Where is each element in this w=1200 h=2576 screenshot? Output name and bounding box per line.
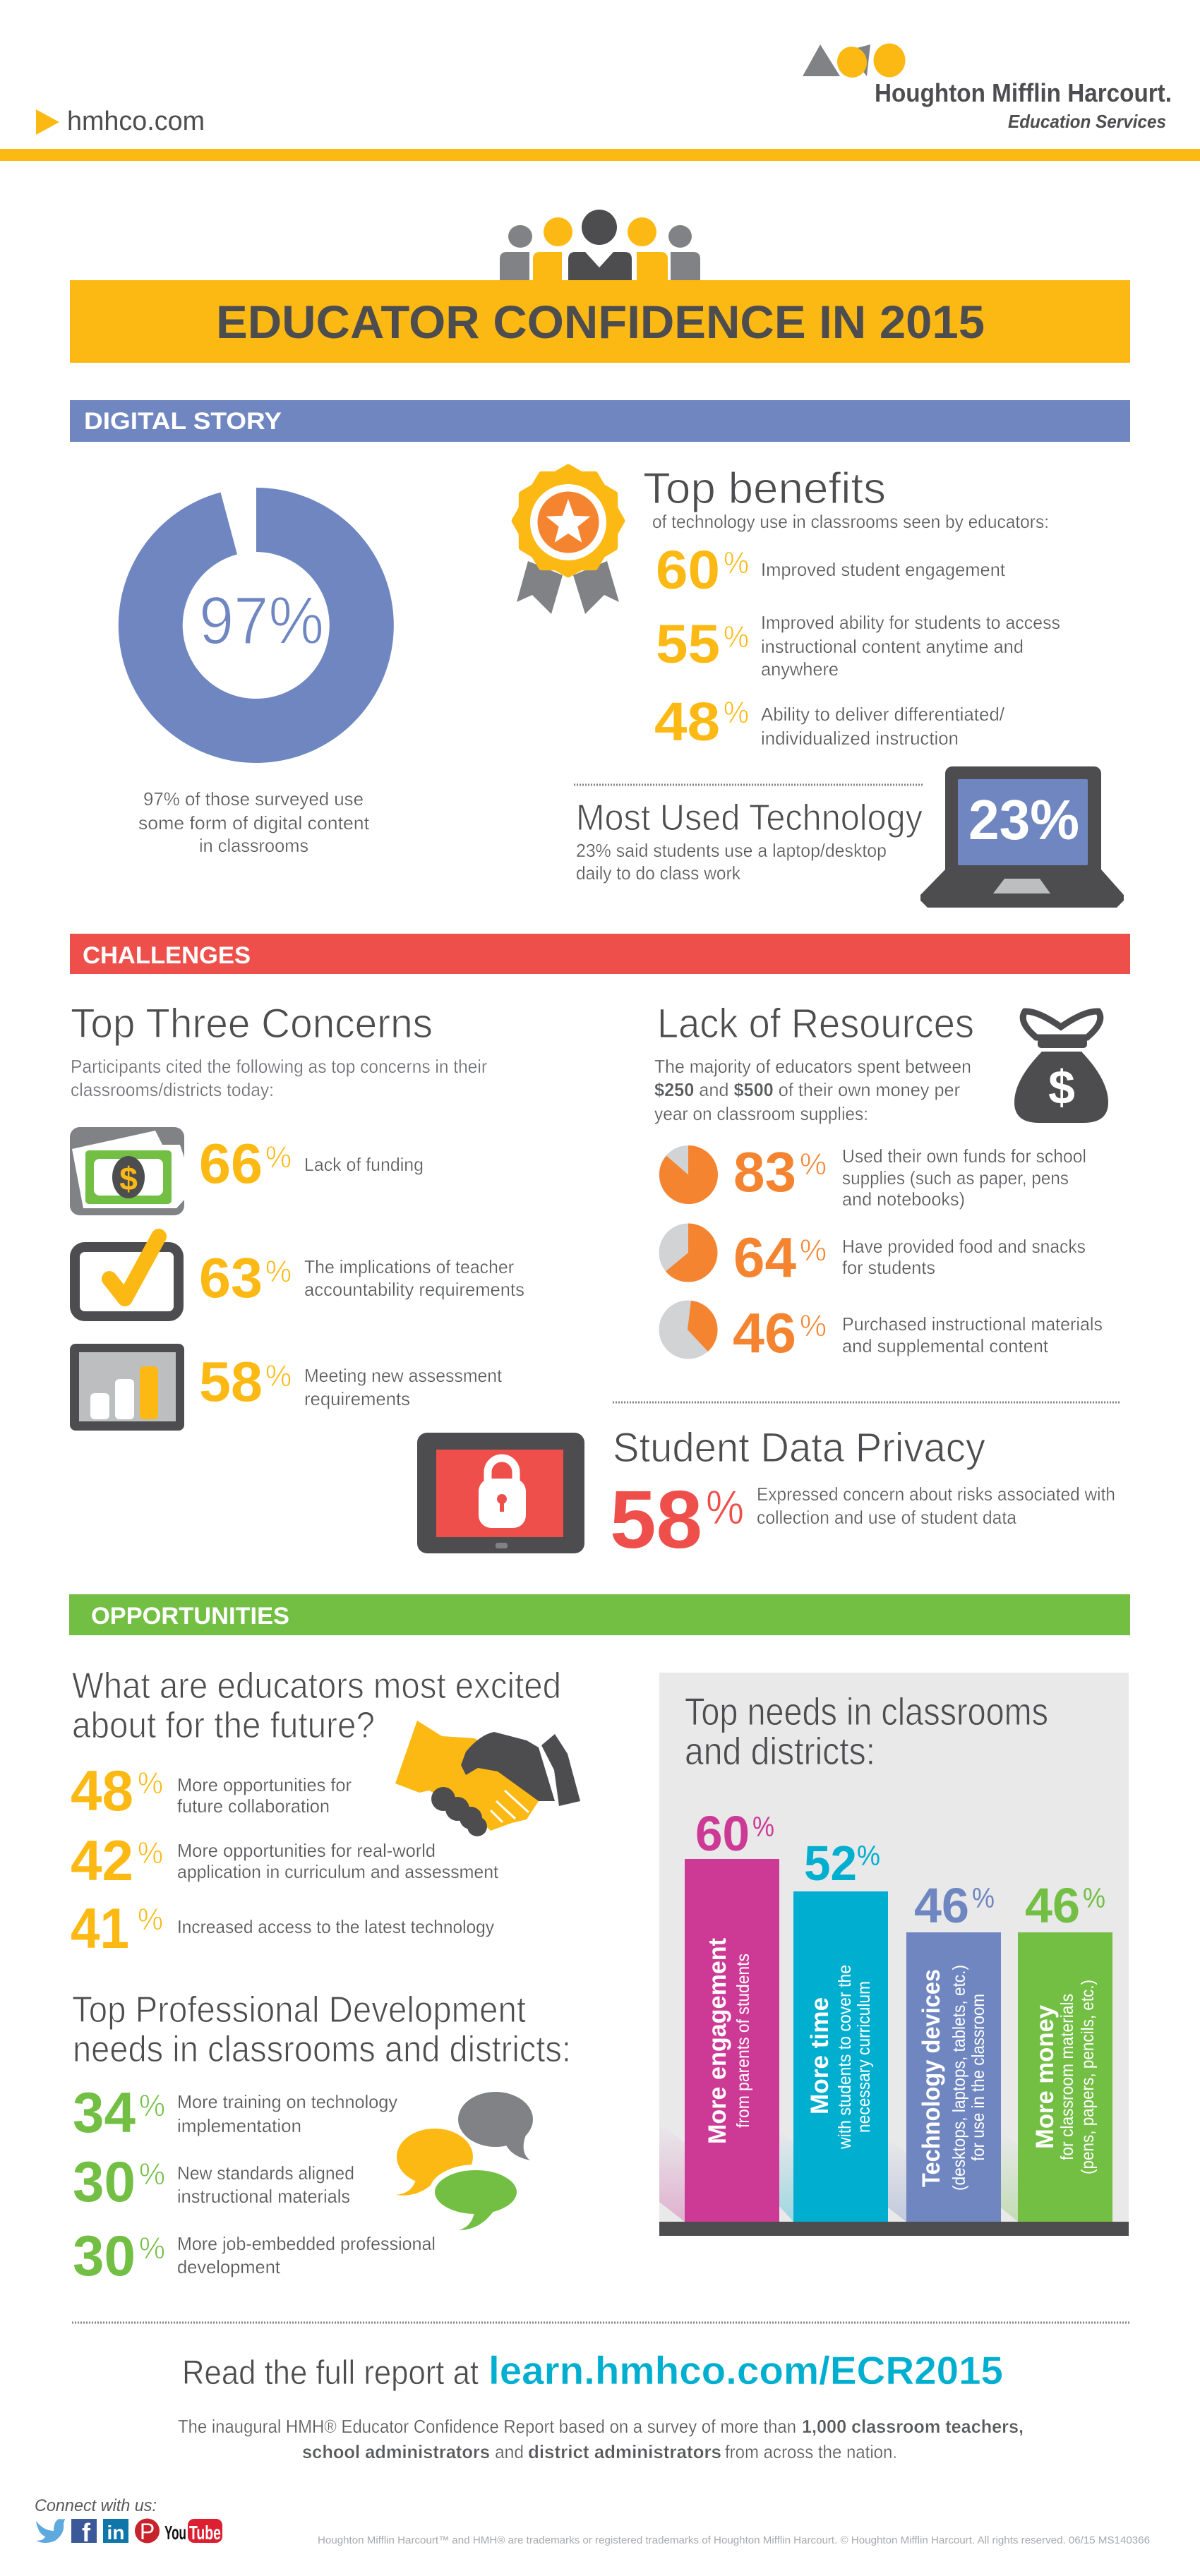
stat: 66%: % (265, 1140, 292, 1174)
report description: The inaugural HMH® Educator Confidence Report based on a survey of more than (178, 2416, 796, 2437)
stat: 60%: Improved student engagement (761, 559, 1006, 580)
bar: more time 52%: with students to cover the (835, 1965, 855, 2150)
bar: more time 52% (793, 1836, 888, 2222)
stat: 58%: Meeting new assessment (304, 1365, 503, 1386)
stat: 30% second: % (139, 2231, 165, 2265)
stat: 83%: % (800, 1147, 827, 1181)
bar: more money 46%: 46 (1025, 1878, 1080, 1933)
icon: bar chart (70, 1344, 184, 1431)
stat: 30% (73, 2150, 354, 2214)
panel: top three concerns: Top Three Concerns (71, 1001, 433, 1047)
stat: 34%: implementation (177, 2115, 301, 2136)
icon: linkedin (103, 2519, 128, 2544)
panel: professional development needs: Top Professional Development (72, 1990, 526, 2030)
stat: 63%: 63 (199, 1246, 263, 1309)
stat: 48%: More opportunities for (177, 1774, 352, 1795)
stat: 64%: for students (842, 1257, 935, 1278)
section header: challenges: CHALLENGES (83, 942, 251, 969)
stat: 58%: 58 (199, 1350, 263, 1413)
subheading: of technology use in classrooms seen by educators: (652, 511, 1049, 532)
report description: from across the nation. (725, 2441, 897, 2462)
bar: more money 46%: (pens, papers, pencils, etc.) (1078, 1980, 1098, 2174)
stat: 55% (656, 612, 1060, 680)
social media (35, 2496, 222, 2547)
icon: youtube (164, 2519, 222, 2544)
title: EDUCATOR CONFIDENCE IN 2015 (216, 296, 985, 348)
stat: 63%: The implications of teacher (304, 1256, 514, 1277)
icon: laptop 23%: 23% (968, 788, 1079, 851)
donut caption: some form of digital content (138, 812, 370, 833)
stat: 66%: 66 (199, 1132, 263, 1195)
icon: money: $ (119, 1160, 138, 1197)
logo division name: Education Services (1008, 111, 1166, 132)
panel: student data privacy (610, 1425, 1115, 1565)
icon: group of people (500, 210, 700, 280)
chart baseline (659, 2222, 1129, 2236)
stat: 46%: and supplemental content (842, 1335, 1049, 1356)
section header: opportunities (69, 1594, 1130, 1635)
bar: more engagement 60%: More engagement (704, 1938, 731, 2144)
stat: 30%: New standards aligned (177, 2162, 354, 2184)
stat: 46%: 46 (733, 1301, 796, 1364)
stat: 63% (199, 1246, 524, 1309)
bar: more money 46%: % (1083, 1883, 1105, 1914)
panel: excitement for the future (71, 1666, 580, 1961)
logo wordmark: Houghton Mifflin Harcourt. (875, 78, 1172, 107)
stat: 60%: 60 (656, 540, 720, 601)
bar: technology devices 46%: 46 (914, 1878, 969, 1933)
stat: 64% (733, 1226, 1086, 1289)
panel: student data privacy: % (706, 1481, 744, 1534)
panel: excitement for the future: about for the future? (72, 1705, 375, 1746)
panel: student data privacy: 58 (610, 1474, 702, 1565)
bar: more engagement 60%: from parents of students (733, 1954, 753, 2128)
donut chart: 97%: 97% (199, 583, 324, 658)
stat: 48%: Ability to deliver differentiated/ (761, 704, 1005, 725)
call to action: learn.hmhco.com/ECR2015 (488, 2348, 1003, 2393)
stat: 63%: % (265, 1254, 292, 1289)
stat: 30% second (73, 2225, 436, 2288)
stat: 48%: % (138, 1766, 163, 1800)
stat: 41%: 41 (71, 1897, 129, 1961)
stat: 58% (199, 1350, 503, 1413)
pie: 46% (659, 1300, 718, 1359)
stat: 58%: % (265, 1359, 292, 1393)
connect label: Connect with us: (35, 2496, 157, 2515)
bar: more engagement 60% (685, 1806, 779, 2222)
stat: 48% (71, 1759, 352, 1823)
stat: 60% (656, 540, 1006, 601)
bar: more money 46% (1018, 1878, 1112, 2222)
stat: 83%: supplies (such as paper, pens (842, 1167, 1069, 1188)
stat: 42% (71, 1829, 499, 1893)
stat: 48%: % (724, 695, 749, 730)
bar: more time 52%: % (857, 1841, 880, 1872)
stat: 30% second: 30 (73, 2225, 136, 2288)
stat: 41% (71, 1897, 494, 1961)
stat: 55%: 55 (656, 614, 720, 675)
panel: professional development needs: needs in classrooms and districts: (73, 2029, 571, 2070)
stat: 34%: More training on technology (177, 2091, 397, 2112)
panel: most used technology: 23% said students use a laptop/desktop (576, 840, 887, 861)
stat: 48%: individualized instruction (761, 728, 959, 749)
donut caption: 97% of those surveyed use (143, 788, 364, 809)
stat: 30% second: More job-embedded professional (177, 2233, 436, 2254)
legal text: Houghton Mifflin Harcourt™ and HMH® are trademarks or registered trademarks of Houghton Mifflin Harcourt. © Houghton Mifflin Harcourt. All rights reserved. 06/15 MS140366 (318, 2534, 1150, 2546)
bar: more time 52%: 52 (804, 1836, 857, 1891)
icon: facebook: f (82, 2518, 91, 2547)
donut caption: in classrooms (199, 835, 308, 856)
stat: 66% (199, 1132, 424, 1195)
stat: 34%: % (139, 2088, 165, 2123)
stat: 46% (733, 1301, 1103, 1364)
stat: 42%: 42 (71, 1829, 133, 1893)
panel: lack of resources: year on classroom supplies: (654, 1103, 868, 1124)
bar: technology devices 46%: Technology devices (918, 1969, 945, 2187)
title banner (70, 280, 1130, 363)
panel: top three concerns (70, 1001, 524, 1431)
stat: 42%: More opportunities for real-world (177, 1840, 436, 1861)
stat: 66%: Lack of funding (304, 1154, 424, 1175)
report description: and (495, 2441, 524, 2462)
bar: technology devices 46%: (desktops, laptops, tablets, etc.) (949, 1965, 969, 2191)
stat: 64%: Have provided food and snacks (842, 1236, 1086, 1257)
icon: youtube: Tube (189, 2522, 221, 2544)
bar: more money 46%: More money (1031, 2004, 1059, 2149)
stat: 41%: % (138, 1902, 163, 1937)
donut caption (138, 788, 370, 856)
stat: 83%: Used their own funds for school (842, 1145, 1086, 1167)
panel: student data privacy: Student Data Privacy (613, 1425, 985, 1471)
header (0, 43, 1200, 161)
heading: Top benefits (643, 464, 886, 513)
stat: 64%: 64 (733, 1226, 797, 1289)
icon: money (70, 1127, 184, 1215)
bar: more engagement 60%: % (752, 1812, 774, 1843)
stat: 60%: % (724, 546, 749, 580)
panel: student data privacy: Expressed concern about risks associated with (757, 1483, 1115, 1505)
icon: pinterest (135, 2518, 160, 2544)
bar: more time 52%: More time (806, 1997, 834, 2114)
bar: more engagement 60%: 60 (695, 1806, 750, 1861)
header rule (0, 149, 1200, 161)
panel: most used technology: Most Used Technology (576, 798, 923, 838)
stat: 48%: future collaboration (177, 1795, 330, 1817)
report description: district administrators (528, 2441, 721, 2462)
heading: Top needs in classrooms (685, 1690, 1048, 1733)
stat: 48% (654, 692, 1005, 752)
section header: opportunities: OPPORTUNITIES (91, 1603, 289, 1630)
section header: challenges (70, 934, 1130, 974)
stat: 34% (73, 2081, 397, 2145)
stat: 46%: % (800, 1308, 827, 1343)
stat: 83%: and notebooks) (842, 1188, 965, 1210)
icon: handshake (395, 1721, 580, 1836)
stat: 58%: requirements (304, 1388, 410, 1409)
icon: pinterest: P (140, 2519, 155, 2544)
panel: top benefits (643, 464, 1060, 752)
panel: lack of resources (654, 1001, 1108, 1364)
icon: facebook (71, 2518, 97, 2547)
panel: lack of resources: The majority of educators spent between (654, 1056, 971, 1077)
panel: student data privacy: collection and use of student data (757, 1507, 1017, 1528)
panel: most used technology: daily to do class work (576, 862, 741, 884)
icon: yellow arrow (36, 109, 59, 135)
panel: top needs bar chart (659, 1673, 1129, 2236)
icon: checkmark (75, 1236, 179, 1316)
stat: 46%: Purchased instructional materials (842, 1313, 1103, 1335)
panel: top needs bar chart: and districts: (685, 1729, 875, 1773)
bar: technology devices 46%: for use in the classroom (968, 1994, 988, 2161)
stat: 55%: % (724, 620, 749, 654)
stat: 83%: 83 (733, 1140, 796, 1203)
stat: 42%: % (138, 1836, 163, 1870)
panel: lack of resources: Lack of Resources (657, 1001, 974, 1047)
bar: more money 46%: for classroom materials (1057, 1994, 1077, 2160)
stat: 42%: application in curriculum and assessment (177, 1861, 499, 1882)
stat: 55%: Improved ability for students to access (761, 612, 1060, 633)
report description: school administrators (302, 2441, 490, 2462)
panel: top three concerns: Participants cited the following as top concerns in their (71, 1056, 487, 1077)
bar: more time 52%: necessary curriculum (854, 1981, 874, 2133)
icon: speech bubbles (396, 2092, 533, 2230)
bar: technology devices 46%: % (972, 1883, 995, 1914)
stat: 41%: Increased access to the latest technology (177, 1916, 494, 1937)
stat: 34%: 34 (73, 2081, 136, 2145)
section header: digital story: DIGITAL STORY (84, 408, 282, 435)
intro line with dollar amounts: $250 and $500 of their own money per (654, 1079, 960, 1100)
donut chart: 97% (119, 488, 394, 763)
stat: 30%: % (139, 2157, 165, 2191)
panel: most used technology (576, 798, 923, 884)
website link: hmhco.com (67, 107, 205, 136)
panel: excitement for the future: What are educators most excited (72, 1666, 561, 1707)
pie: 64% (659, 1224, 717, 1282)
report description: 1,000 classroom teachers, (802, 2416, 1024, 2437)
panel: professional development needs (72, 1990, 571, 2288)
stat: 83% (733, 1140, 1086, 1210)
icon: youtube: You (164, 2522, 186, 2544)
stat: 30%: instructional materials (177, 2186, 350, 2207)
logo mark (803, 43, 905, 81)
icon: award medal (515, 467, 622, 614)
icon: money bag: $ (1048, 1061, 1075, 1114)
stat: 55%: anywhere (761, 658, 839, 680)
stat: 55%: instructional content anytime and (761, 636, 1024, 657)
stat: 63%: accountability requirements (304, 1279, 524, 1300)
stat: 48%: 48 (654, 692, 720, 752)
icon: tablet with padlock (417, 1433, 584, 1553)
panel: top three concerns: classrooms/districts today: (71, 1079, 274, 1100)
stat: 30%: 30 (73, 2150, 136, 2214)
bar: technology devices 46% (906, 1878, 1001, 2222)
icon: laptop 23% (920, 766, 1124, 908)
icon: linkedin: in (107, 2522, 124, 2544)
stat: 48%: 48 (71, 1759, 133, 1823)
call to action (182, 2348, 1003, 2393)
stat: 30% second: development (177, 2256, 281, 2277)
call to action: Read the full report at (182, 2354, 479, 2392)
icon: twitter (36, 2519, 65, 2543)
report description (178, 2416, 1024, 2462)
icon: money bag (1014, 1011, 1108, 1123)
pie: 83% (659, 1145, 718, 1204)
section header: digital story (70, 400, 1130, 442)
stat: 64%: % (800, 1233, 827, 1268)
